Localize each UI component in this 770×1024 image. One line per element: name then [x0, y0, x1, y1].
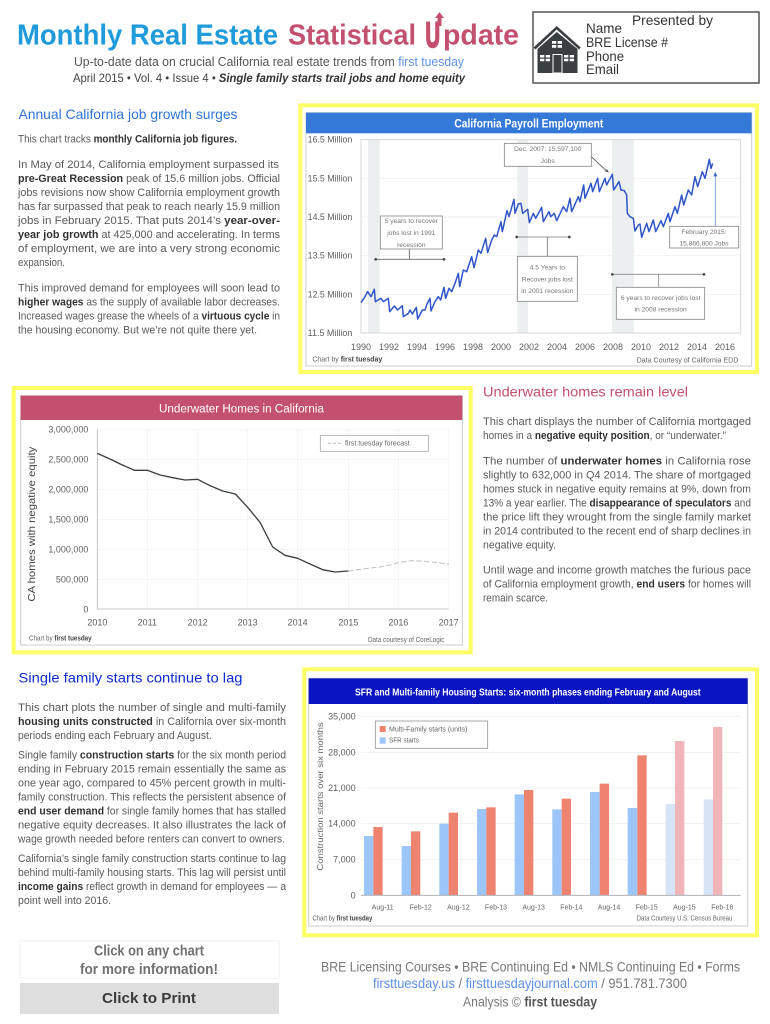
- title: Monthly Real Estate: [17, 20, 278, 52]
- x axis labels: 2016: [715, 342, 735, 352]
- chart header: Underwater Homes in California: [159, 402, 324, 416]
- text block: underwater homes: slightly to 632,000 in Q4 2014. The share of mortgaged: [483, 469, 751, 481]
- x axis labels: 2016: [388, 618, 408, 628]
- x axis labels: 2015: [338, 618, 358, 628]
- text block: single family starts: This chart plots the number of single and multi-family: [18, 702, 287, 714]
- text block: single family starts: [17, 702, 287, 907]
- data source: Data Courtesy U.S. Census Bureau: [637, 916, 732, 923]
- x axis labels: [87, 618, 459, 628]
- y axis labels: 14.5 Million: [308, 212, 352, 222]
- x axis labels: 1994: [407, 342, 427, 352]
- text block: job growth: year job growth at 425,000 and accelerating. In terms: [18, 229, 280, 241]
- chart header: [21, 396, 462, 420]
- x axis labels: 1992: [379, 342, 399, 352]
- text block: single family starts: negative equity decreases. It also illustrates the lack of: [18, 820, 287, 832]
- y axis labels: 35,000: [328, 711, 356, 721]
- title: pdate: [443, 20, 519, 52]
- subtitle: Up-to-date data on crucial California real estate trends from first tuesday: [74, 54, 464, 69]
- underwater homes line: [97, 453, 348, 572]
- x axis labels: Feb-13: [485, 905, 507, 912]
- text block: single family starts: ending in February 2015 remain essentially the same as: [18, 764, 286, 776]
- x axis labels: 2000: [491, 342, 511, 352]
- x axis labels: 2004: [547, 342, 567, 352]
- x axis labels: 1990: [351, 342, 371, 352]
- x axis labels: Aug-14: [598, 905, 620, 912]
- y axis labels: 14,000: [328, 819, 356, 829]
- chart header: California Payroll Employment: [454, 117, 603, 131]
- x axis labels: 2013: [238, 618, 258, 628]
- text block: single family starts: Single family construction starts for the six month period: [18, 750, 286, 762]
- y axis labels: 2,500,000: [48, 455, 88, 465]
- y axis labels: 3,000,000: [48, 425, 88, 435]
- y axis labels: 7,000: [333, 855, 356, 865]
- y axis labels: [308, 135, 352, 338]
- text block: job growth: expansion.: [18, 257, 65, 269]
- callout: February 2015: [670, 172, 739, 248]
- callout: 2008 recession: [611, 273, 705, 319]
- callout: February 2015: 15,866,800 Jobs: [679, 240, 729, 247]
- callout: Dec 2007: Dec. 2007: 15,597,100: [514, 146, 582, 153]
- callout: 2001 recession: in 2001 recession: [521, 288, 574, 295]
- title: U: [426, 16, 440, 56]
- icon: house: [534, 26, 581, 73]
- text block: underwater homes: homes in a negative equity position, or “underwater.”: [483, 430, 726, 442]
- title: [17, 12, 519, 56]
- text block: single family starts: one year ago, compared to 45% percent growth in multi-: [18, 778, 286, 790]
- callout: 1991 recession: [374, 216, 445, 261]
- footer: analysis credit: Analysis © first tuesday: [463, 994, 597, 1010]
- x axis labels: 2011: [138, 618, 157, 628]
- text block: job growth: [17, 134, 281, 336]
- x axis labels: Feb-15: [636, 905, 658, 912]
- y axis labels: 15.5 Million: [308, 173, 352, 183]
- text block: single family starts: periods ending each February and August.: [18, 730, 212, 742]
- x axis labels: 2006: [575, 342, 595, 352]
- callout: 2001 recession: [515, 236, 577, 301]
- text block: single family starts: wage growth needed before renters can convert to owners.: [17, 834, 285, 846]
- x axis labels: 2014: [288, 618, 308, 628]
- y axis labels: 13.5 Million: [308, 251, 352, 261]
- multi-family bars: [373, 727, 722, 895]
- text block: job growth: Increased wages grease the wheels of a virtuous cycle in: [18, 310, 280, 322]
- legend: SFR starts: [389, 737, 419, 744]
- chart header: [306, 113, 752, 133]
- text block: underwater homes: The number of underwater homes in California rose: [483, 455, 751, 467]
- chart credit: Chart by first tuesday: [29, 635, 92, 642]
- y axis labels: 2,000,000: [48, 485, 88, 495]
- text block: underwater homes: homes stuck in negative equity remains at 9%, down from: [483, 483, 751, 495]
- issue line: April 2015 • Vol. 4 • Issue 4 • Single family starts trail jobs and home equity: [73, 71, 466, 85]
- employment line: [361, 159, 713, 319]
- x axis labels: Feb-12: [410, 905, 432, 912]
- x axis labels: 2014: [687, 342, 707, 352]
- callout: click on chart: for more information!: [80, 961, 218, 978]
- presenter box: BRE License #: [586, 34, 668, 50]
- text block: job growth: the housing economy. But we’re not quite there yet.: [18, 324, 257, 336]
- footer: links: firsttuesday.us / firsttuesdayjournal.com / 951.781.7300: [373, 975, 687, 991]
- heading: job growth: Annual California job growth surges: [18, 106, 238, 122]
- x axis labels: 1998: [463, 342, 483, 352]
- button: click to print: [20, 983, 279, 1014]
- text block: job growth: jobs revisions now show California employment growth: [17, 187, 280, 199]
- y axis labels: 16.5 Million: [308, 135, 352, 145]
- x axis labels: Aug-11: [372, 905, 394, 912]
- text block: single family starts: end user demand for single family homes that has stalled: [18, 806, 286, 818]
- x axis labels: Feb-14: [560, 905, 583, 912]
- chart header: SFR and Multi-family Housing Starts: six-month phases ending February and August: [355, 687, 701, 698]
- x axis labels: Feb-16: [711, 905, 734, 912]
- legend: first tuesday forecast: [345, 441, 410, 448]
- text block: underwater homes: remain scarce.: [483, 593, 548, 605]
- x axis labels: 2012: [659, 342, 679, 352]
- text block: single family starts: income gains reflect growth in demand for employees — a: [18, 881, 287, 893]
- y axis title: CA homes with negative equity: [27, 447, 38, 602]
- presenter box: Email: [586, 61, 619, 77]
- callout: Dec 2007: Jobs: [541, 158, 555, 165]
- text block: job growth: higher wages as the supply of available labor decreases.: [18, 296, 280, 308]
- legend: [320, 435, 428, 451]
- presenter box: Name: [586, 20, 622, 36]
- title: Statistical: [288, 20, 416, 52]
- text block: job growth: In May of 2014, California employment surpassed its: [18, 159, 280, 171]
- x axis labels: 1996: [435, 342, 455, 352]
- presenter box: Presented by: [632, 12, 713, 28]
- panel: Underwater Homes chart: [14, 388, 471, 652]
- y axis labels: 21,000: [328, 783, 356, 793]
- legend: Multi-Family starts (units): [389, 727, 467, 734]
- y axis labels: 1,000,000: [48, 545, 88, 555]
- callout: Dec 2007: [504, 143, 609, 173]
- heading: underwater homes: Underwater homes remain level: [483, 384, 688, 400]
- x axis labels: 2010: [87, 618, 107, 628]
- chart credit: Chart by first tuesday: [312, 916, 372, 923]
- x axis labels: 2012: [188, 618, 208, 628]
- forecast line: [348, 561, 449, 571]
- presenter box: [533, 12, 759, 83]
- legend: [375, 721, 488, 748]
- text block: underwater homes: the price lift they wrought from the single family market: [483, 511, 751, 523]
- y axis labels: 28,000: [328, 747, 356, 757]
- text block: job growth: This improved demand for employees will soon lead to: [18, 282, 280, 294]
- y axis labels: 12.5 Million: [308, 289, 352, 299]
- callout: February 2015: February 2015:: [681, 229, 727, 236]
- text block: underwater homes: of California employment growth, end users for homes will: [483, 579, 751, 591]
- x axis labels: 2010: [631, 342, 651, 352]
- text block: underwater homes: [483, 416, 751, 605]
- text block: underwater homes: This chart displays the number of California mortgaged: [483, 416, 751, 428]
- callout: 1991 recession: jobs lost in 1991: [386, 230, 436, 237]
- x axis labels: Aug-13: [522, 905, 545, 912]
- y axis labels: [328, 711, 356, 900]
- presenter box: Phone: [586, 48, 624, 64]
- text block: single family starts: California’s single family construction starts continue to lag: [18, 853, 286, 865]
- callout: 2008 recession: 6 years to recover jobs lost: [621, 295, 701, 302]
- callout: click on chart: Click on any chart: [94, 943, 204, 960]
- text block: underwater homes: Until wage and income growth matches the furious pace: [483, 565, 751, 577]
- data source: Data Courtesy of California EDD: [637, 357, 738, 364]
- callout: 1991 recession: recession: [397, 242, 426, 249]
- panel: California Payroll Employment chart: [300, 105, 757, 372]
- x axis labels: [351, 342, 735, 352]
- chart credit: Chart by first tuesday: [312, 356, 382, 363]
- text block: job growth: This chart tracks monthly California job figures.: [18, 134, 237, 146]
- text block: job growth: pre-Great Recession peak of 15.6 million jobs. Official: [18, 173, 280, 185]
- text block: single family starts: behind multi-family housing starts. This lag will persist until: [18, 867, 286, 879]
- y axis title: Construction starts over six months: [315, 722, 325, 871]
- text block: single family starts: housing units constructed in California over six-month: [18, 716, 286, 728]
- data source: Data courtesy of CoreLogic: [368, 637, 445, 644]
- y axis labels: 1,500,000: [48, 515, 88, 525]
- callout: 2008 recession: in 2008 recession: [635, 307, 687, 314]
- y axis labels: [48, 425, 88, 614]
- text block: single family starts: point well into 2016.: [18, 895, 111, 907]
- heading: single family starts: Single family starts continue to lag: [18, 669, 242, 685]
- y axis labels: 11.5 Million: [308, 328, 352, 338]
- text block: single family starts: family construction. This reflects the persistent absence of: [18, 792, 287, 804]
- text block: job growth: has far surpassed that peak to reach nearly 15.9 million: [18, 201, 280, 213]
- text block: job growth: jobs in February 2015. That puts 2014’s year-over-: [17, 215, 280, 227]
- y axis labels: 0: [351, 890, 356, 900]
- text block: underwater homes: in 2014 contributed to the recent end of sharp declines in: [483, 525, 751, 537]
- x axis labels: [372, 905, 734, 912]
- chart header: [309, 678, 748, 704]
- callout: 2001 recession: Recover jobs lost: [522, 276, 573, 283]
- y axis labels: 500,000: [56, 575, 88, 585]
- panel: Housing Starts chart: [304, 669, 757, 935]
- callout: click on chart: [20, 941, 279, 978]
- button: click to print: Click to Print: [102, 990, 196, 1007]
- x axis labels: Aug-15: [673, 905, 696, 912]
- callout: 2001 recession: 4.5 Years to: [530, 264, 565, 271]
- y axis labels: 0: [83, 604, 88, 614]
- callout: 1991 recession: 5 years to recover: [385, 218, 439, 225]
- text block: underwater homes: 13% a year earlier. The disappearance of speculators and: [483, 497, 751, 509]
- SFR bars: [364, 792, 713, 895]
- text block: underwater homes: negative equity.: [483, 539, 556, 551]
- x axis labels: 2002: [519, 342, 539, 352]
- text block: job growth: of employment, we are into a very strong economic: [18, 243, 281, 255]
- x axis labels: Aug-12: [447, 905, 470, 912]
- x axis labels: 2017: [439, 618, 459, 628]
- x axis labels: 2008: [603, 342, 623, 352]
- recession shading: [368, 140, 634, 333]
